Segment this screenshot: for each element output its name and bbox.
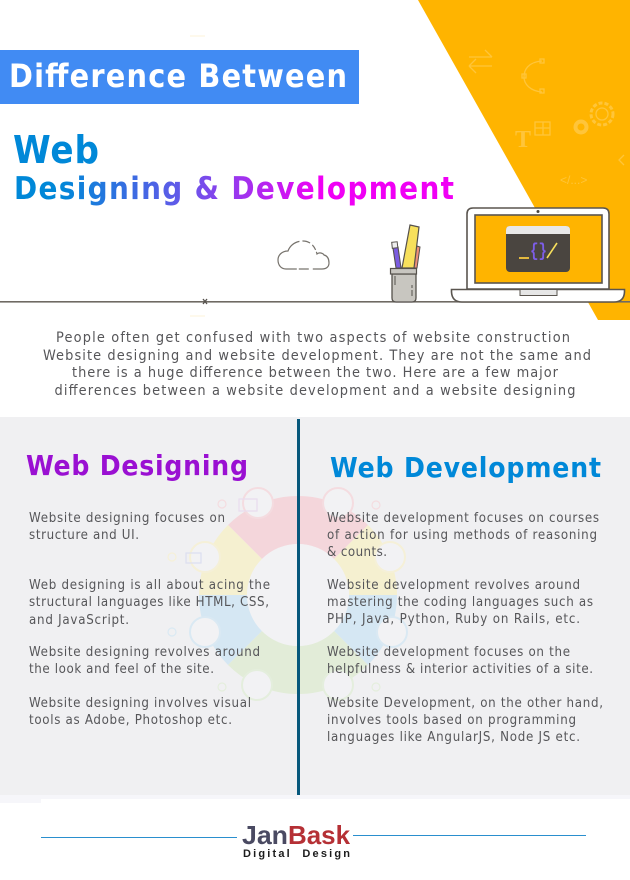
heading: Web Development: Web Development: [330, 451, 601, 484]
column: Web Development: [327, 451, 603, 745]
ground line: [0, 301, 630, 303]
intro paragraph: [43, 330, 591, 399]
icon: laptop: [452, 208, 624, 302]
faint tech icons on yellow panel: T: [515, 127, 531, 153]
faint tech icons on yellow panel: [469, 50, 624, 187]
point 4: [327, 696, 603, 745]
point 2: structural languages like HTML, CSS,: [29, 595, 269, 610]
center divider: [297, 419, 300, 795]
point 4: Website Development, on the other hand,: [327, 696, 603, 711]
footer rule right: [353, 835, 586, 836]
title: Web: Web: [13, 128, 99, 172]
background donut graphic: [168, 488, 407, 700]
panel background: [0, 417, 630, 795]
point 2: mastering the coding languages such as: [327, 595, 593, 610]
intro paragraph: differences between a website development and a website designing: [54, 383, 576, 399]
icon: pencil cup: [390, 225, 420, 302]
point 4: involves tools based on programming: [327, 713, 576, 728]
yellow diagonal panel: [418, 0, 630, 320]
point 1: & counts.: [327, 545, 387, 560]
icon: small cross: [203, 299, 207, 304]
point 2: PHP, Java, Python, Ruby on Rails, etc.: [327, 612, 580, 627]
icon: cloud: [278, 241, 329, 269]
logo: JanBask Digital Design: Digital Design: [243, 848, 350, 860]
intro paragraph: Website designing and website development. They are not the same and: [43, 348, 591, 364]
point 4: tools as Adobe, Photoshop etc.: [29, 713, 232, 728]
point 2: Website development revolves around: [327, 578, 580, 593]
point 1: [327, 511, 599, 560]
decorative dashes: [190, 36, 205, 316]
footer rule left: [41, 837, 237, 838]
point 4: Website designing involves visual: [29, 696, 251, 711]
point 4: [29, 696, 251, 728]
point 1: of action for using methods of reasoning: [327, 528, 597, 543]
point 3: [29, 645, 260, 677]
banner: Difference Between: [0, 50, 359, 104]
terminal window: [506, 226, 570, 272]
logo: JanBask Digital Design: [242, 820, 351, 860]
point 2: and JavaScript.: [29, 613, 129, 628]
point 1: [29, 511, 225, 543]
point 3: the look and feel of the site.: [29, 662, 214, 677]
intro paragraph: People often get confused with two aspects of website construction: [56, 330, 570, 346]
point 2: Web designing is all about acing the: [29, 578, 270, 593]
logo: JanBask Digital Design: Jan: [242, 820, 288, 850]
point 2: [29, 578, 270, 628]
intro paragraph: there is a huge difference between the two. Here are a few major: [72, 365, 559, 381]
column: Web Designing: [26, 449, 270, 728]
point 3: Website designing revolves around: [29, 645, 260, 660]
point 1: Website development focuses on courses: [327, 511, 599, 526]
point 4: languages like AngularJS, Node JS etc.: [327, 730, 580, 745]
point 3: [327, 645, 593, 677]
terminal window: {}: [530, 242, 547, 262]
logo: JanBask Digital Design: Bask: [288, 820, 351, 850]
point 1: Website designing focuses on: [29, 511, 225, 526]
point 3: helpfulness & interior activities of a site.: [327, 662, 593, 677]
title: Designing & Development: Designing & Development: [14, 171, 454, 207]
point 2: [327, 578, 593, 627]
point 3: Website development focuses on the: [327, 645, 570, 660]
faint tech icons on yellow panel: </...>: [560, 173, 587, 187]
banner: Difference Between: Difference Between: [9, 57, 347, 95]
panel bottom edge: [0, 795, 630, 803]
heading: Web Designing: Web Designing: [26, 449, 248, 482]
point 1: structure and UI.: [29, 528, 139, 543]
